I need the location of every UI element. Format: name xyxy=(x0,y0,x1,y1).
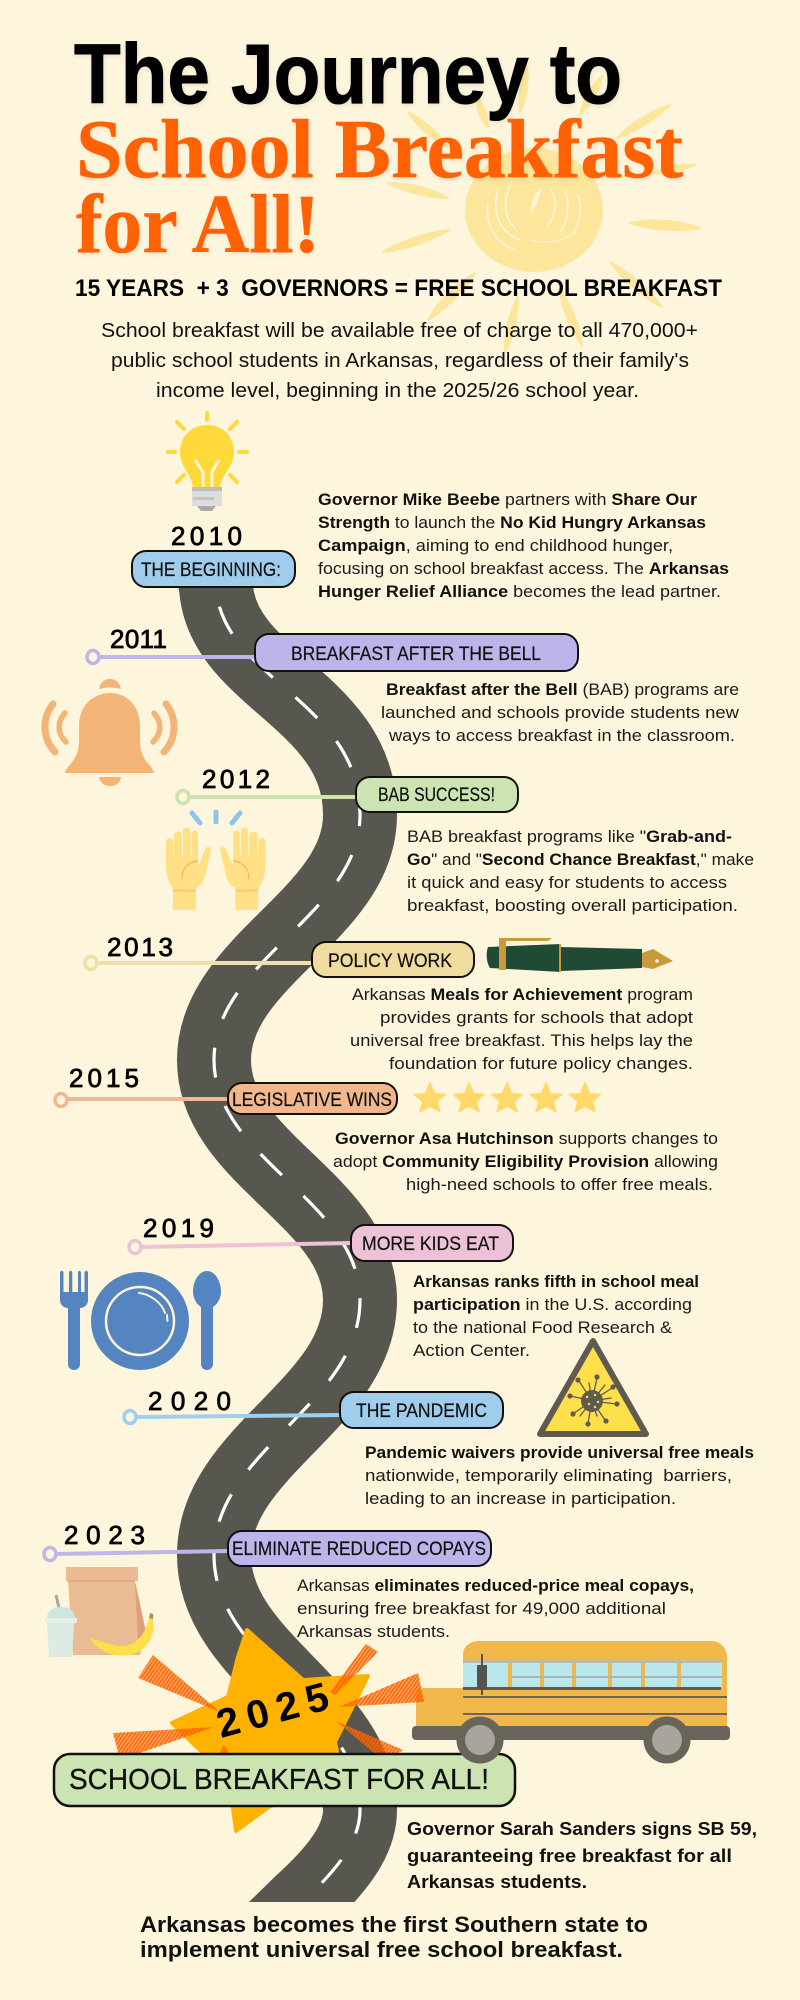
description: to the national Food Research & xyxy=(413,1319,672,1337)
description xyxy=(381,681,739,745)
2012: BAB success xyxy=(166,764,754,915)
description: Hunger Relief Alliance becomes the lead partner. xyxy=(318,583,721,601)
pill xyxy=(351,1225,513,1261)
icon: brown bag lunch xyxy=(45,1567,154,1657)
year: 2020 xyxy=(148,1386,231,1416)
description xyxy=(365,1444,754,1508)
description: universal free breakfast. This helps lay the xyxy=(350,1032,693,1050)
2019: more kids eat xyxy=(60,1213,699,1370)
pill: THE PANDEMIC xyxy=(356,1401,487,1422)
intro paragraph xyxy=(101,320,698,402)
year: 2010 xyxy=(171,521,242,551)
pill: MORE KIDS EAT xyxy=(362,1234,499,1255)
description: foundation for future policy changes. xyxy=(389,1055,693,1073)
2013: policy work xyxy=(85,932,693,1073)
connector xyxy=(85,956,313,970)
description: Breakfast after the Bell (BAB) programs are xyxy=(386,681,739,699)
title xyxy=(74,27,683,271)
year: 2015 xyxy=(69,1063,139,1093)
description: provides grants for schools that adopt xyxy=(380,1009,693,1027)
starburst xyxy=(113,1630,403,1831)
description: ensuring free breakfast for 49,000 additional xyxy=(297,1600,666,1618)
icon: crayon sun xyxy=(383,67,700,353)
icon: fountain pen xyxy=(487,938,673,972)
description: leading to an increase in participation. xyxy=(365,1490,676,1508)
intro paragraph: public school students in Arkansas, regardless of their family's xyxy=(111,350,689,372)
closing statement xyxy=(140,1912,648,1962)
description: Go" and "Second Chance Breakfast ," make xyxy=(407,851,754,869)
pill: LEGISLATIVE WINS xyxy=(232,1090,392,1111)
pill xyxy=(356,777,518,812)
intro paragraph: income level, beginning in the 2025/26 school year. xyxy=(156,380,639,402)
2015: legislative wins xyxy=(55,1063,718,1194)
description: high-need schools to offer free meals. xyxy=(406,1176,713,1194)
connector xyxy=(177,790,357,804)
description xyxy=(350,986,693,1073)
pill: BAB SUCCESS! xyxy=(378,785,495,806)
pill xyxy=(255,634,578,671)
2020: the pandemic xyxy=(124,1341,754,1508)
2011: breakfast after the bell xyxy=(45,624,739,786)
year: 2019 xyxy=(143,1213,214,1243)
2010: the beginning xyxy=(132,491,729,601)
description xyxy=(333,1130,718,1194)
description xyxy=(407,828,754,915)
description: BAB breakfast programs like " Grab-and- xyxy=(407,828,732,846)
icon: five stars xyxy=(413,1081,602,1113)
connector xyxy=(124,1410,341,1424)
orange ray over bus xyxy=(339,1673,424,1707)
pill xyxy=(228,1083,397,1114)
connector xyxy=(87,650,256,664)
pill xyxy=(312,942,474,977)
description: Arkansas students. xyxy=(297,1623,450,1641)
icon: virus warning triangle xyxy=(540,1341,646,1434)
pill: SCHOOL BREAKFAST FOR ALL! xyxy=(69,1764,489,1796)
description: Governor Sarah Sanders signs SB 59, xyxy=(407,1818,757,1839)
intro paragraph: School breakfast will be available free of charge to all 470,000+ xyxy=(101,320,698,342)
icon: bell xyxy=(45,679,174,786)
pill xyxy=(228,1531,491,1566)
pill xyxy=(340,1392,503,1428)
description: Arkansas students. xyxy=(407,1871,587,1892)
description xyxy=(318,491,729,601)
description: Pandemic waivers provide universal free meals xyxy=(365,1444,754,1462)
description: participation in the U.S. according xyxy=(413,1296,692,1314)
year: 2012 xyxy=(202,764,270,794)
title: The Journey to xyxy=(74,27,622,121)
description: Arkansas ranks fifth in school meal xyxy=(413,1273,699,1291)
description: guaranteeing free breakfast for all xyxy=(407,1845,732,1866)
title: for All! xyxy=(76,178,320,271)
connector xyxy=(44,1548,229,1560)
icon: raised hands xyxy=(166,812,265,910)
2023: eliminate reduced copays xyxy=(44,1520,694,1657)
icon: school bus xyxy=(412,1641,730,1764)
road xyxy=(211,562,360,1941)
pill: ELIMINATE REDUCED COPAYS xyxy=(232,1539,486,1560)
description: Action Center. xyxy=(413,1342,530,1360)
year: 2011 xyxy=(110,624,167,654)
description: it quick and easy for students to access xyxy=(407,874,727,892)
year: 2013 xyxy=(107,932,173,962)
pill: THE BEGINNING: xyxy=(141,560,281,581)
year: 2025 xyxy=(212,1675,333,1747)
pill: BREAKFAST AFTER THE BELL xyxy=(291,644,541,665)
closing statement: Arkansas becomes the first Southern state to xyxy=(140,1912,648,1937)
connector xyxy=(129,1240,352,1254)
description xyxy=(407,1818,757,1892)
description: ways to access breakfast in the classroom. xyxy=(388,727,735,745)
subtitle equation: 15 YEARS + 3 GOVERNORS = FREE SCHOOL BREAKFAST xyxy=(75,275,722,302)
description xyxy=(413,1273,699,1360)
title: School Breakfast xyxy=(76,103,683,196)
description xyxy=(297,1577,694,1641)
description: nationwide, temporarily eliminating barriers, xyxy=(365,1467,732,1485)
description: Arkansas eliminates reduced-price meal copays, xyxy=(297,1577,694,1595)
description: adopt Community Eligibility Provision allowing xyxy=(333,1153,718,1171)
description: Governor Mike Beebe partners with Share Our xyxy=(318,491,698,509)
description: Arkansas Meals for Achievement program xyxy=(352,986,693,1004)
description: breakfast, boosting overall participation. xyxy=(407,897,738,915)
description: Campaign , aiming to end childhood hunger, xyxy=(318,537,673,555)
icon: plate fork spoon xyxy=(60,1271,221,1370)
closing statement: implement universal free school breakfast. xyxy=(140,1937,623,1962)
description: Governor Asa Hutchinson supports changes to xyxy=(335,1130,718,1148)
pill xyxy=(54,1754,515,1806)
2025: school breakfast for all xyxy=(54,1630,757,1892)
pill xyxy=(132,551,295,587)
connector xyxy=(55,1094,229,1106)
year: 2023 xyxy=(64,1520,145,1550)
description: focusing on school breakfast access. The Arkansas xyxy=(318,560,729,578)
icon: light bulb xyxy=(168,413,247,511)
description: launched and schools provide students new xyxy=(381,704,739,722)
description: Strength to launch the No Kid Hungry Arkansas xyxy=(318,514,706,532)
pill: POLICY WORK xyxy=(328,951,452,972)
